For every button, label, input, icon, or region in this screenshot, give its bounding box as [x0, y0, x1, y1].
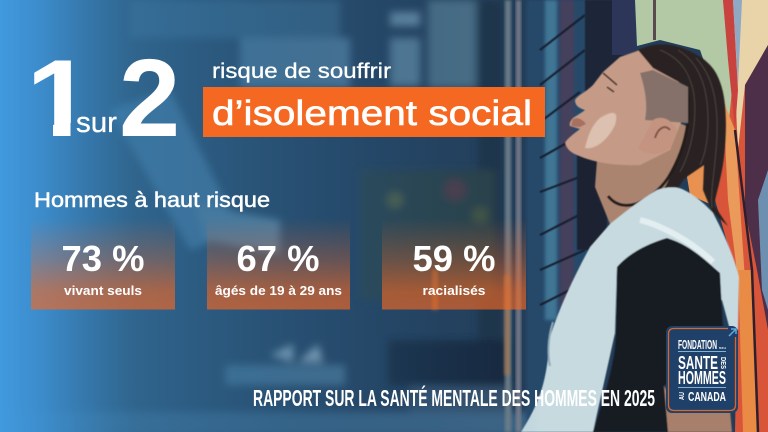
headline: 1 sur 2: 1 — [26, 36, 93, 160]
face — [565, 50, 690, 165]
stat card: vivant seuls: vivant seuls — [64, 283, 142, 298]
photo: man looking upward — [521, 44, 739, 432]
logo: Fondation Santé des hommes au Canada — [666, 326, 738, 413]
cheek highlight — [585, 113, 616, 148]
stat card: racialisés: 59 % — [412, 238, 496, 279]
headline: 1 sur 2: sur — [76, 107, 117, 139]
logo: Fondation Santé des hommes au Canada: FONDATION — [678, 337, 717, 352]
orange banner: d'isolement social — [203, 87, 545, 137]
logo: Fondation Santé des hommes au Canada: POUR LA — [719, 346, 726, 350]
stat card: âgés de 19 à 29 ans: âgés de 19 à 29 ans — [215, 283, 342, 298]
ear — [638, 118, 677, 154]
lips — [571, 118, 586, 127]
dark pillar — [585, 0, 635, 100]
orange banner: d'isolement social: d’isolement social — [212, 94, 532, 133]
logo: Fondation Santé des hommes au Canada: SANTE — [678, 352, 718, 373]
headline: 1 sur 2: 2 — [119, 37, 180, 160]
logo: Fondation Santé des hommes au Canada: HOMMES — [678, 367, 726, 388]
braided hair — [638, 44, 728, 226]
logo: Fondation Santé des hommes au Canada: DES — [719, 357, 726, 369]
mural wall — [635, 0, 768, 432]
eye and brow — [603, 73, 617, 92]
section heading: Hommes à haut risque: Hommes à haut risque — [34, 188, 270, 212]
stat card: âgés de 19 à 29 ans — [207, 218, 350, 310]
stat card: vivant seuls — [31, 218, 175, 310]
stat card: racialisés — [382, 218, 526, 310]
left blue gradient overlay — [0, 0, 540, 432]
stat card: racialisés: racialisés — [422, 283, 486, 298]
black t-shirt — [593, 238, 723, 432]
neck — [595, 110, 695, 224]
headline: 1 sur 2 — [34, 58, 176, 136]
logo: Fondation Santé des hommes au Canada: CANADA — [688, 390, 726, 404]
shaved side of head — [640, 70, 688, 123]
arm — [664, 386, 732, 432]
subheading: risque de souffrir: risque de souffrir — [212, 59, 391, 83]
brick wall — [527, 0, 589, 432]
icon: arrow — [729, 329, 736, 336]
white vest — [521, 187, 739, 432]
stat card: âgés de 19 à 29 ans: 67 % — [236, 238, 320, 279]
stat card: vivant seuls: 73 % — [62, 238, 144, 279]
logo: Fondation Santé des hommes au Canada: AU — [679, 392, 686, 400]
